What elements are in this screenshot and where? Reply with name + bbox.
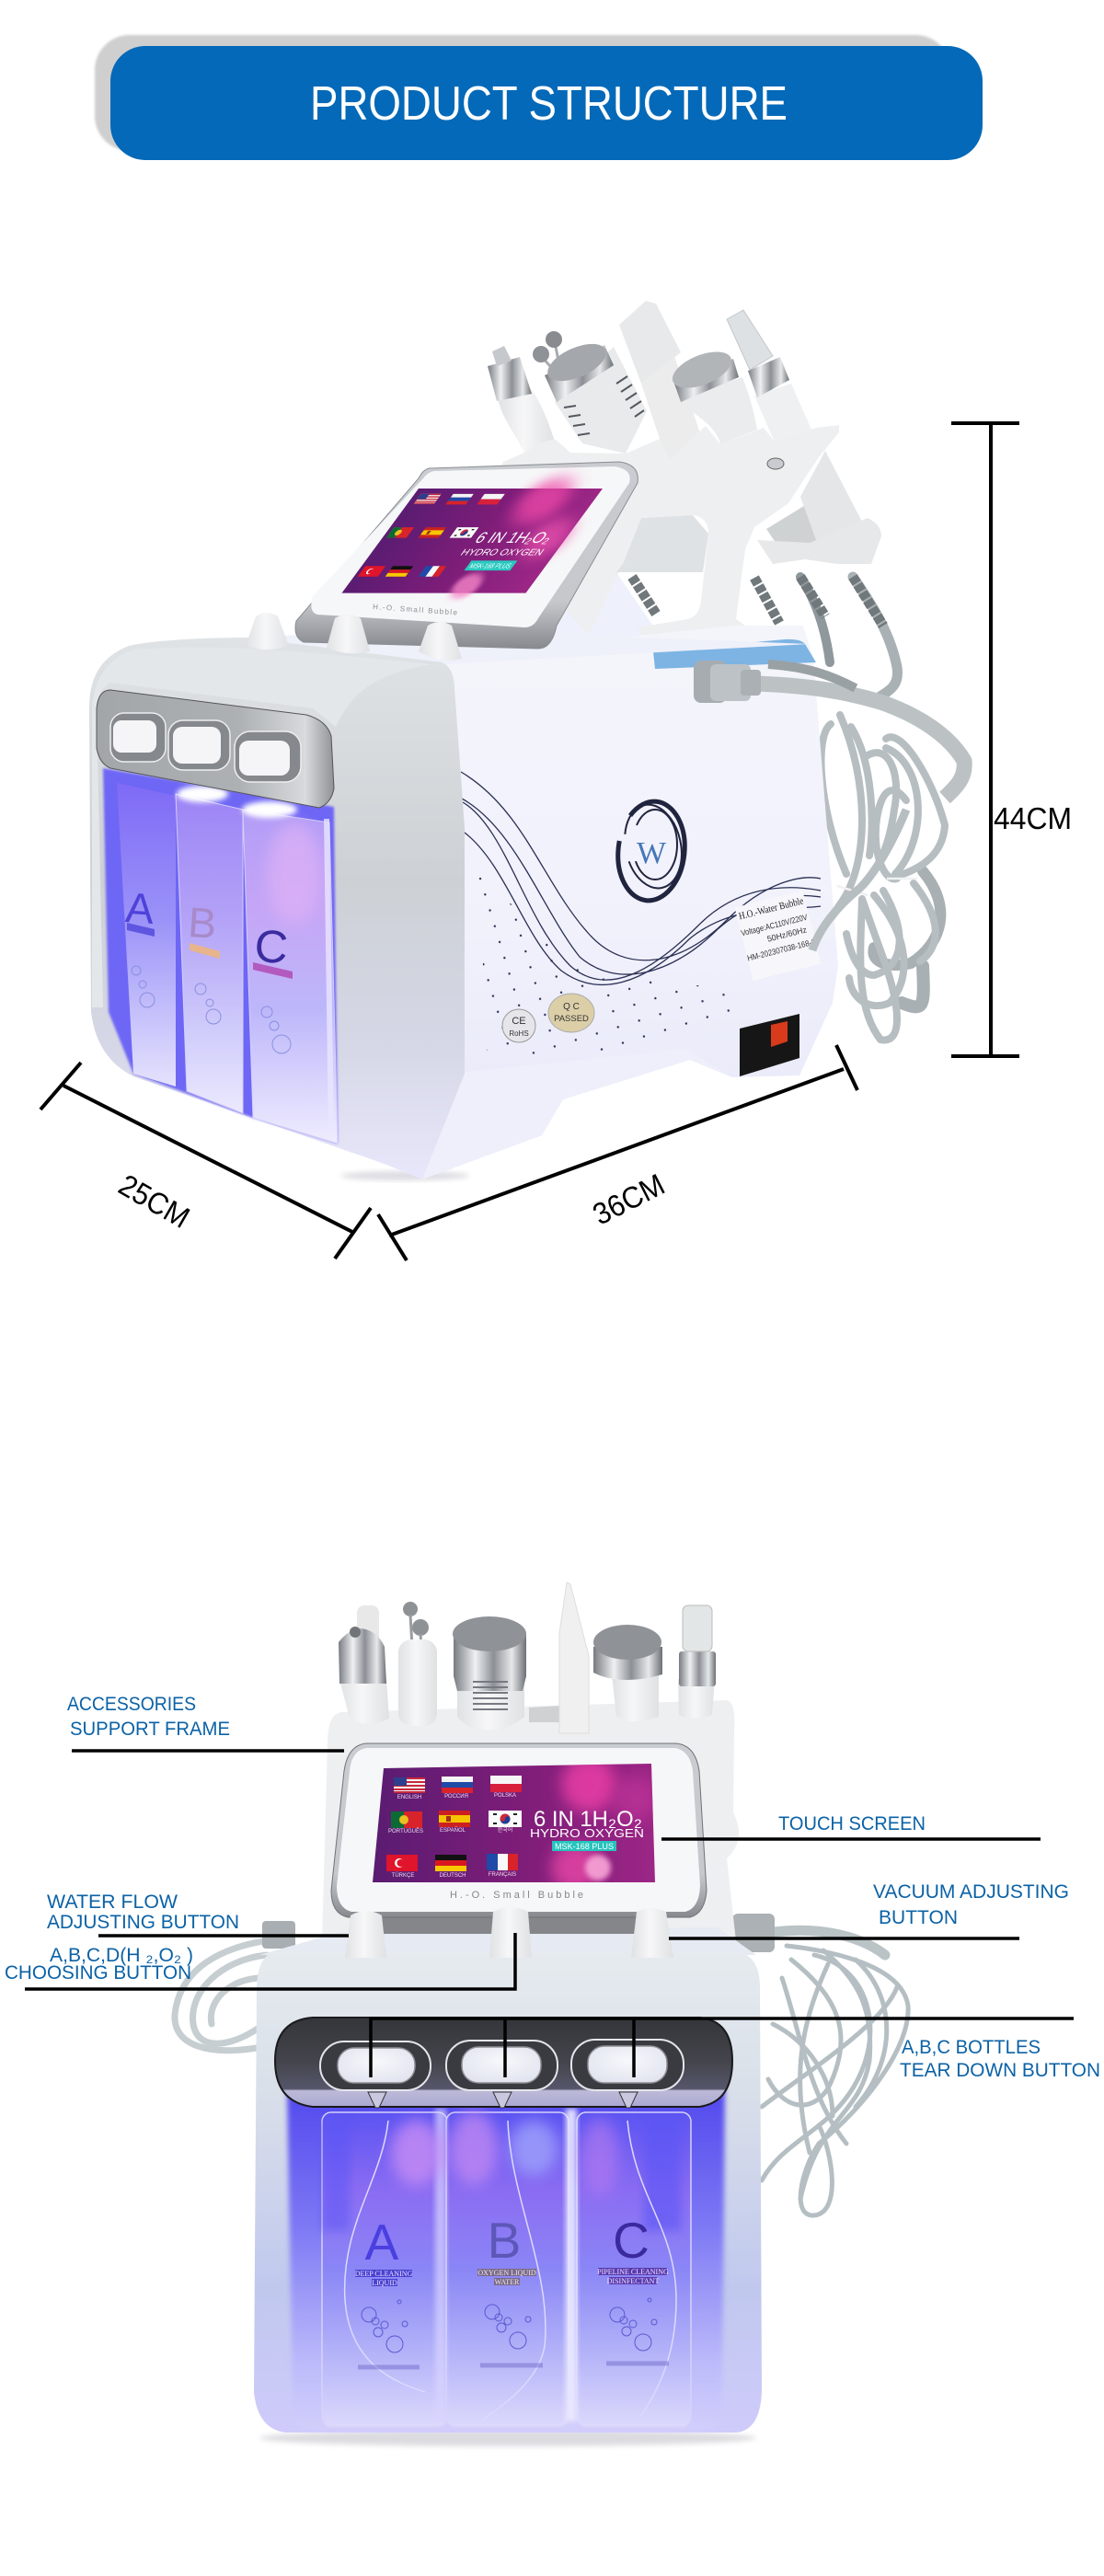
spec label: Voltage:AC110V/220V	[740, 913, 809, 937]
chrome button panel	[275, 2018, 732, 2107]
dimension: width 36CM	[378, 1045, 857, 1260]
right cables	[762, 1946, 908, 2215]
flag captions: FRANÇAIS	[489, 1872, 516, 1878]
connector and thick cable	[694, 661, 964, 950]
bottle A	[322, 2112, 447, 2427]
ground shadow	[259, 2430, 756, 2446]
bottle fine print	[358, 2363, 669, 2367]
blue control strip	[653, 639, 816, 669]
device right side panel	[422, 626, 838, 1179]
flag captions: 한국어	[498, 1826, 512, 1834]
flag captions: PORTUGUÊS	[388, 1827, 423, 1834]
frame inner recess	[616, 515, 708, 572]
holstered handles	[766, 451, 862, 552]
bottle letter A: A	[124, 883, 155, 933]
bottle window glow	[103, 768, 338, 1144]
light glows	[322, 2109, 681, 2421]
purple window	[287, 2088, 725, 2431]
bottle bubbles	[132, 966, 291, 1053]
left cables	[175, 1939, 276, 2051]
flag captions	[388, 1793, 516, 1879]
spec label: HM-202307038-168-8	[746, 937, 816, 963]
flag captions: DEUTSCH	[439, 1873, 466, 1879]
QC passed badge	[548, 994, 594, 1032]
flags	[386, 1776, 522, 1871]
QC passed badge: PASSED	[554, 1014, 589, 1024]
bottle B caption: OXYGEN LIQUID	[477, 2269, 536, 2277]
tear down button C	[571, 2040, 684, 2108]
callout: accessories support frame	[67, 1694, 344, 1751]
top knobs	[345, 1907, 673, 1958]
probe: scraper blade	[619, 301, 702, 460]
dimension: depth 25CM: 25CM	[113, 1167, 196, 1235]
callout: bottles tear down button: A,B,C BOTTLES	[902, 2037, 1041, 2058]
gray panel under screen	[363, 1909, 639, 1934]
swirl lines	[461, 772, 821, 984]
spec label: 50Hz/60Hz	[766, 925, 808, 944]
logo letter: W	[637, 836, 667, 870]
callout: bottles tear down button	[371, 2018, 1100, 2081]
tear down buttons	[110, 713, 301, 782]
callout: water flow adjusting button: ADJUSTING BUTTON	[47, 1912, 239, 1933]
callout: choosing button: CHOOSING BUTTON	[5, 1962, 191, 1984]
screen model tag: MSK-168 PLUS	[467, 562, 514, 569]
CE RoHS badge: RoHS	[509, 1029, 529, 1038]
probe: diamond tip handle	[339, 1627, 389, 1724]
product photo: device front view	[175, 1582, 908, 2446]
stand behind screen	[515, 569, 662, 658]
screen subheadline: HYDRO OXYGEN	[530, 1826, 644, 1840]
flag captions: ENGLISH	[397, 1795, 421, 1800]
screen chrome bezel	[295, 462, 638, 649]
cable bundle	[812, 715, 945, 1040]
screen chrome bezel	[331, 1743, 707, 1917]
front frame light band	[92, 648, 432, 1007]
tear down button B	[446, 2041, 558, 2108]
dimension: depth 25CM	[40, 1063, 371, 1259]
bottle C	[577, 2112, 691, 2427]
bottle C	[243, 810, 338, 1144]
top knobs	[246, 613, 462, 661]
callout: vacuum adjusting button	[669, 1881, 1069, 1938]
bottle A caption: DEEP CLEANING	[355, 2270, 413, 2278]
probe: round head handle	[593, 1625, 662, 1721]
probe: diamond tip handle	[488, 346, 555, 454]
bottle C caption: PIPELINE CLEANING	[597, 2268, 669, 2276]
probe: nozzle handle	[678, 1605, 716, 1719]
CE RoHS badge	[502, 1009, 535, 1042]
title banner	[95, 35, 983, 160]
bottle C caption: DISINFECTANT	[607, 2277, 659, 2285]
W swirl logo	[614, 799, 689, 903]
callout: bottles tear down button: TEAR DOWN BUTTON	[900, 2060, 1100, 2081]
main right cable	[775, 1930, 885, 1955]
screen headline: 6 IN 1H₂O₂	[534, 1807, 642, 1832]
frame badge	[767, 458, 784, 469]
callout: choosing button: A,B,C,D(H ₂,O₂ )	[50, 1945, 193, 1966]
callout: choosing button	[5, 1933, 515, 1989]
callout: water flow adjusting button	[47, 1892, 349, 1936]
bottle B	[176, 794, 243, 1113]
dimension: height 44CM	[951, 423, 1072, 1056]
screen white bezel	[337, 1748, 700, 1912]
probe: round head handle	[667, 344, 757, 444]
lower base shading	[422, 1049, 732, 1179]
dimension: height 44CM: 44CM	[994, 801, 1072, 835]
CE RoHS badge: CE	[512, 1016, 526, 1027]
inner tubes	[345, 2121, 676, 2420]
bottle A caption	[355, 2270, 413, 2287]
screen headline: 6 IN 1H₂O₂	[471, 530, 557, 546]
bezel brand text: H.-O. Small Bubble	[373, 603, 458, 616]
frame rear shadow	[529, 1706, 563, 1722]
callout: vacuum adjusting button: VACUUM ADJUSTING	[873, 1881, 1069, 1903]
bottle letter B: B	[488, 2212, 521, 2269]
bottle letter B: B	[187, 898, 218, 948]
probe: RF head with vents	[542, 337, 647, 454]
bottle A	[117, 783, 176, 1087]
probe: twin ball handle	[533, 331, 562, 366]
top deck	[259, 1927, 756, 1955]
flag captions: ESPAÑOL	[440, 1827, 466, 1834]
left connector	[262, 1921, 295, 1949]
spec label: H.O.-Water Bubble	[738, 895, 805, 922]
ground shadow	[340, 1171, 469, 1180]
bottle letter A: A	[365, 2214, 399, 2271]
tear down button A	[320, 2041, 431, 2108]
bottle B	[446, 2112, 569, 2427]
power switch	[740, 1014, 799, 1076]
front body	[89, 638, 465, 1179]
callout: vacuum adjusting button: BUTTON	[879, 1907, 958, 1928]
bottle B caption	[477, 2269, 536, 2286]
bottle letter C: C	[613, 2212, 650, 2269]
callout: accessories support frame: ACCESSORIES	[67, 1694, 196, 1715]
body	[254, 1951, 762, 2432]
bottle C caption	[597, 2268, 669, 2285]
touch screen display	[373, 1764, 655, 1882]
cable strain reliefs	[632, 577, 883, 626]
callout: water flow adjusting button: WATER FLOW	[47, 1892, 178, 1913]
flag captions: TÜRKÇE	[392, 1872, 414, 1879]
spec label	[735, 891, 821, 981]
right connector	[732, 1914, 775, 1952]
rear cable	[853, 577, 898, 699]
dimension: width 36CM: 36CM	[587, 1167, 670, 1232]
top deck	[246, 626, 810, 664]
QC passed badge: Q C	[563, 1002, 580, 1012]
callout: accessories support frame: SUPPORT FRAME	[70, 1719, 230, 1740]
probe: twin ball handle	[398, 1602, 437, 1726]
screen white bezel	[311, 466, 630, 627]
speaker dot grid	[478, 874, 736, 1058]
rear probe backing	[357, 1605, 379, 1651]
probe: scraper blade	[559, 1582, 589, 1733]
probe: RF head with vents	[453, 1616, 526, 1730]
accessory support frame	[322, 1700, 739, 1941]
product photo: device side view with dimensions	[89, 301, 964, 1180]
bottle A caption: LIQUID	[372, 2279, 397, 2287]
screen model tag: MSK-168 PLUS	[555, 1842, 614, 1851]
touch screen display	[338, 477, 613, 599]
accessory support frame	[478, 425, 839, 637]
chrome button panel	[97, 690, 334, 808]
callout: touch screen: TOUCH SCREEN	[778, 1813, 926, 1834]
probe: nozzle handle	[727, 310, 811, 444]
cable ties	[837, 879, 917, 895]
bottle B caption: WATER	[495, 2278, 520, 2286]
middle cable	[800, 577, 830, 662]
bottle caption tags	[127, 923, 293, 979]
handle collar	[757, 518, 881, 564]
screen subheadline: HYDRO OXYGEN	[458, 548, 546, 558]
flag captions: РОССИЯ	[444, 1794, 468, 1800]
bottle glow highlights	[177, 786, 331, 1132]
bezel brand text: H.-O. Small Bubble	[450, 1890, 583, 1901]
bubbles	[362, 2298, 657, 2352]
flag captions: POLSKA	[494, 1793, 516, 1799]
bottle letter C: C	[253, 920, 290, 973]
title text: PRODUCT STRUCTURE	[310, 77, 788, 131]
